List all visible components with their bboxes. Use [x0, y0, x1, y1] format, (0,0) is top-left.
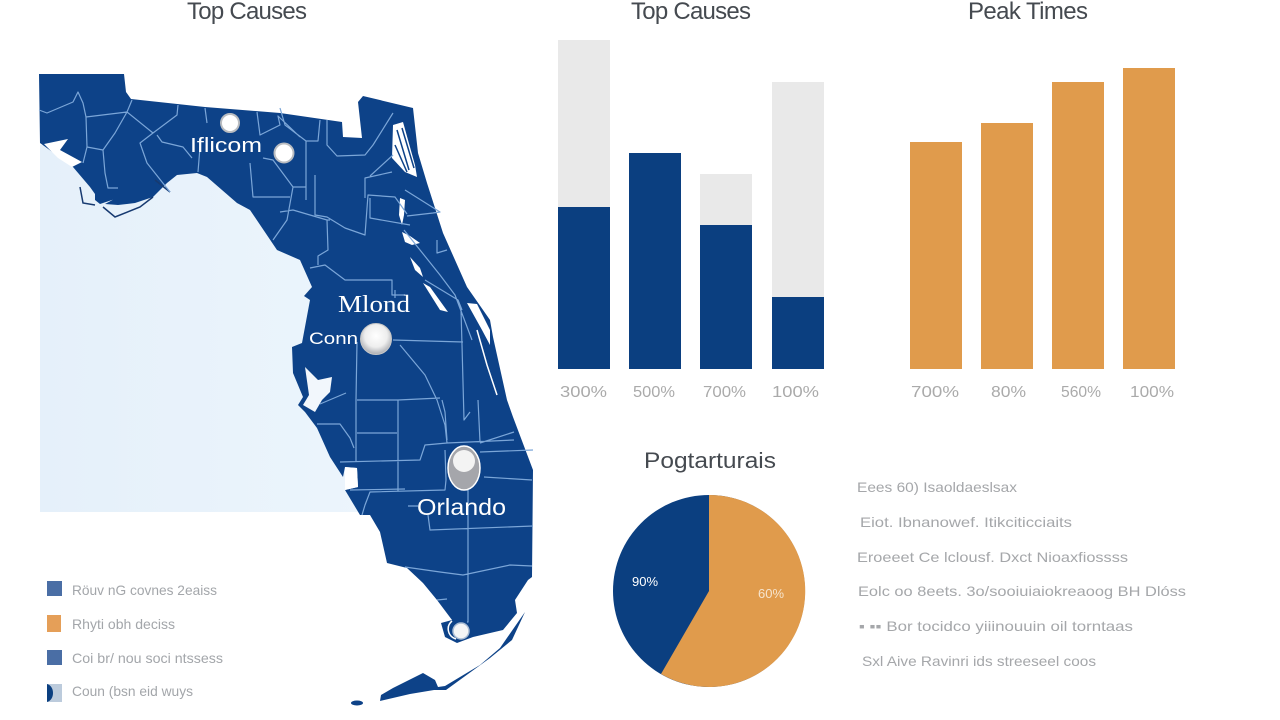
map pin north 2 — [274, 144, 294, 162]
bar axis labels: 500% — [633, 384, 675, 401]
text block: notes: Eolc oo 8eets. 3o/sooiuiaiokreaoog BH Dlóss — [858, 583, 1186, 599]
legend item 1: Röuv nG covnes 2eaiss — [72, 582, 217, 598]
legend item 4: Coun (bsn eid wuys — [72, 683, 193, 699]
text block: notes: Eiot. Ibnanowef. Itikciticciaits — [860, 514, 1072, 530]
text block: notes: Sxl Aive Ravinri ids streeseel coos — [862, 653, 1096, 669]
pie label blue: 90% — [632, 574, 658, 589]
map city label Mlond: Mlond — [338, 292, 410, 318]
bar axis labels: 700% — [703, 384, 746, 401]
map small key — [351, 700, 363, 706]
pie slice orange — [661, 495, 805, 687]
text block: notes: Eees 60) Isaoldaeslsax — [857, 479, 1017, 495]
orange bar 3 — [1052, 82, 1104, 369]
bar 3 — [700, 174, 752, 369]
peak axis labels: 560% — [1061, 384, 1101, 401]
peak axis labels — [911, 384, 1174, 401]
panel: gulf water background — [40, 145, 375, 512]
map pin Orlando — [448, 446, 480, 490]
map county lines — [39, 92, 533, 622]
peak axis labels: 700% — [911, 384, 959, 401]
map thin white east coast line — [477, 330, 497, 395]
text block: notes — [857, 479, 1186, 669]
text block: notes: Eroeeet Ce lclousf. Dxct Nioaxfiossss — [857, 549, 1128, 565]
map pin central — [360, 324, 392, 354]
legend item 2: Rhyti obh deciss — [72, 616, 175, 632]
bar 2 — [629, 153, 681, 369]
map coast outlines — [80, 180, 170, 217]
orange bar 2 — [981, 123, 1033, 369]
legend — [47, 581, 223, 702]
bar 4 — [772, 82, 824, 369]
bar chart: peak times — [910, 68, 1175, 401]
orange bar 4 — [1123, 68, 1175, 369]
bar chart: top causes — [558, 40, 824, 401]
map city label Conn: Conn — [309, 329, 358, 348]
map pin Miami — [448, 621, 469, 639]
map land shape — [39, 74, 533, 643]
peak axis labels: 100% — [1130, 384, 1174, 401]
pie chart — [613, 495, 805, 687]
map dark coastal streaks — [395, 128, 414, 172]
text block: notes: ▪ ▪▪ Bor tocidco yiiinouuin oil torntaas — [859, 618, 1133, 634]
map white coastal shapes — [44, 122, 490, 490]
bar 1 — [558, 40, 610, 369]
map: Florida — [39, 74, 533, 706]
pie label orange: 60% — [758, 586, 784, 601]
pie heading: Pogtarturais — [644, 448, 776, 473]
bar axis labels — [560, 384, 819, 401]
peak axis labels: 80% — [991, 384, 1026, 401]
bar axis labels: 100% — [772, 384, 819, 401]
orange bar 1 — [910, 142, 962, 369]
map florida keys — [380, 612, 525, 701]
legend item 4 — [47, 683, 193, 702]
pie slice blue — [613, 495, 805, 687]
legend item 3: Coi br/ nou soci ntssess — [72, 650, 223, 666]
bar axis labels: 300% — [560, 384, 607, 401]
map pin north 1 — [221, 114, 239, 132]
map city label Iflicom: Iflicom — [190, 135, 262, 157]
map city label Orlando: Orlando — [417, 494, 506, 520]
